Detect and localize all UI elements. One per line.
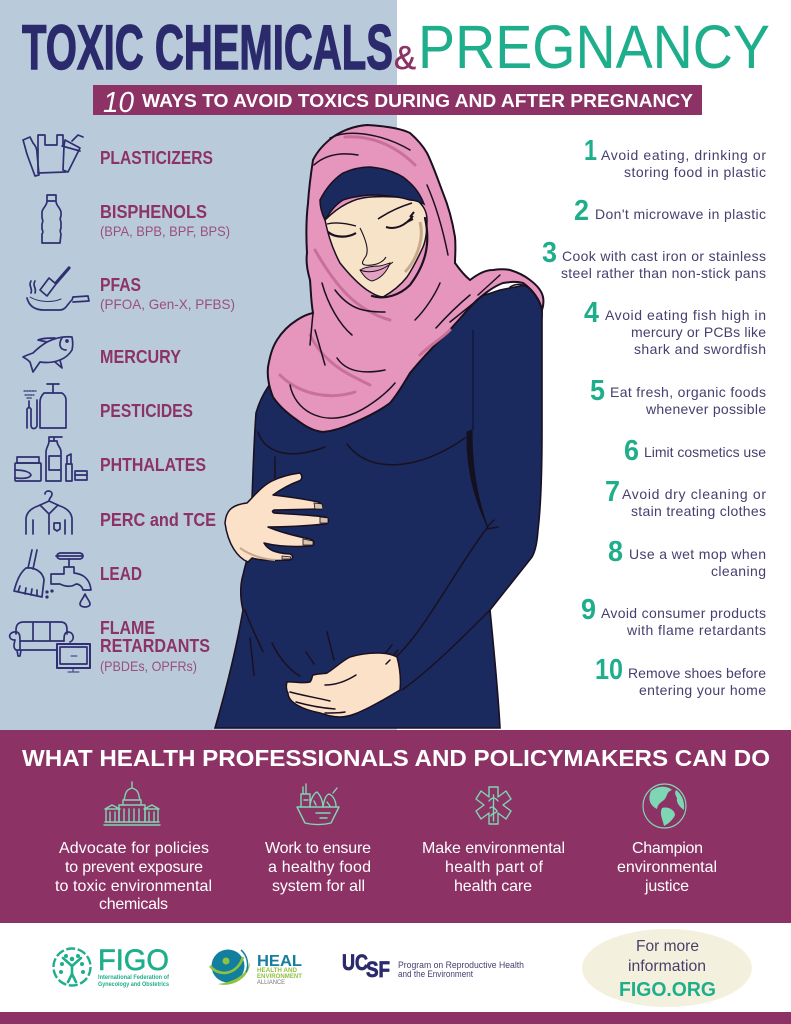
text: perc and tce: PERC and TCE bbox=[100, 510, 216, 530]
text: advocate: Advocate for policies bbox=[59, 840, 209, 857]
text: justice bbox=[617, 840, 717, 895]
text: bisphenols bbox=[100, 202, 230, 239]
text: lead: LEAD bbox=[100, 564, 142, 584]
face bbox=[325, 197, 427, 297]
way 9: 9 bbox=[581, 594, 596, 626]
way 4: mercury or PCBs like bbox=[631, 324, 766, 340]
footer bar bbox=[0, 1012, 791, 1024]
way 6 bbox=[624, 435, 766, 467]
way 1 bbox=[584, 135, 766, 180]
illustration: pregnant woman in hijab bbox=[215, 125, 543, 728]
text: health care: health care bbox=[454, 878, 532, 895]
way 10: Remove shoes before bbox=[628, 665, 766, 681]
callout: for more information: FIGO.ORG bbox=[619, 979, 716, 1001]
logo: FIGO bbox=[54, 944, 170, 988]
way 4 bbox=[584, 297, 766, 357]
text: advocate bbox=[55, 840, 212, 913]
text: plasticizers: PLASTICIZERS bbox=[100, 148, 213, 168]
ways list bbox=[542, 135, 766, 698]
way 5: Eat fresh, organic foods bbox=[610, 384, 766, 400]
panel: blue left background bbox=[0, 0, 397, 730]
text: pfas bbox=[100, 275, 235, 312]
chemical list bbox=[10, 135, 235, 674]
logo: UCSF: SF bbox=[366, 957, 390, 982]
way 9: with flame retardants bbox=[626, 622, 766, 638]
logo: FIGO: FIGO bbox=[98, 944, 169, 977]
way 7 bbox=[605, 476, 766, 519]
dress folds bbox=[245, 330, 498, 690]
logo: FIGO: Gynecology and Obstetrics bbox=[98, 981, 169, 988]
logo: UCSF: and the Environment bbox=[398, 969, 473, 979]
icon: plasticizers bbox=[23, 135, 83, 176]
way 7: 7 bbox=[605, 476, 620, 508]
way 10: 10 bbox=[595, 654, 623, 686]
text: advocate: to toxic environmental bbox=[55, 878, 212, 895]
logo: UCSF: UC bbox=[342, 950, 368, 975]
text: bisphenols: BISPHENOLS bbox=[100, 202, 207, 222]
text: bisphenols: (BPA, BPB, BPF, BPS) bbox=[100, 223, 230, 239]
logo: UCSF: Program on Reproductive Health bbox=[398, 960, 524, 970]
way 8: cleaning bbox=[711, 563, 766, 579]
way 1: 1 bbox=[584, 135, 597, 167]
callout: for more information bbox=[582, 929, 752, 1007]
way 1: Avoid eating, drinking or bbox=[601, 147, 766, 163]
dress bbox=[215, 284, 542, 728]
way 3 bbox=[542, 237, 766, 281]
way 8 bbox=[608, 536, 766, 579]
upper hand bbox=[225, 473, 328, 562]
logo: UCSF bbox=[342, 950, 524, 982]
way 10 bbox=[595, 654, 766, 698]
subtitle banner: WAYS TO AVOID TOXICS DURING AND AFTER PREGNANCY bbox=[142, 91, 693, 111]
text: flame retardants: RETARDANTS bbox=[100, 636, 210, 656]
text: pfas: (PFOA, Gen-X, PFBS) bbox=[100, 296, 235, 312]
way 2: 2 bbox=[574, 195, 589, 227]
icon: sprayer bbox=[24, 384, 66, 429]
title: & bbox=[394, 39, 416, 76]
logo: HEAL: ENVIRONMENT bbox=[257, 974, 302, 980]
text: health care: health part of bbox=[445, 859, 544, 876]
text: flame retardants: FLAME bbox=[100, 618, 155, 638]
headband bbox=[320, 167, 424, 220]
icon: food bowl bbox=[297, 784, 339, 824]
way 3: Cook with cast iron or stainless bbox=[562, 248, 766, 264]
way 4: 4 bbox=[584, 297, 599, 329]
text: food system bbox=[265, 840, 371, 895]
text: justice: environmental bbox=[617, 859, 717, 876]
way 8: Use a wet mop when bbox=[629, 546, 766, 562]
way 5: whenever possible bbox=[645, 401, 766, 417]
way 8: 8 bbox=[608, 536, 623, 568]
hijab folds bbox=[280, 133, 527, 418]
callout: for more information: For more bbox=[636, 938, 699, 955]
text: advocate: to prevent exposure bbox=[65, 859, 203, 876]
way 4: Avoid eating fish high in bbox=[605, 307, 766, 323]
way 7: Avoid dry cleaning or bbox=[622, 486, 766, 502]
way 1: storing food in plastic bbox=[624, 164, 766, 180]
text: mercury: MERCURY bbox=[100, 347, 181, 367]
text: health care bbox=[422, 840, 565, 895]
text: justice: Champion bbox=[632, 840, 703, 857]
way 3: steel rather than non-stick pans bbox=[561, 265, 766, 281]
icon: globe bbox=[643, 784, 686, 828]
way 2: Don't microwave in plastic bbox=[595, 206, 766, 222]
logo: HEAL: HEALTH AND bbox=[257, 968, 298, 974]
icon: bottle bbox=[42, 195, 61, 243]
icon: fish bbox=[23, 337, 73, 372]
way 3: 3 bbox=[542, 237, 557, 269]
icon: pan bbox=[27, 268, 89, 310]
hijab bbox=[268, 125, 543, 432]
logo: HEAL: ALLIANCE bbox=[257, 980, 285, 986]
way 9: Avoid consumer products bbox=[601, 605, 766, 621]
text: phthalates: PHTHALATES bbox=[100, 455, 206, 475]
logo: FIGO: International Federation of bbox=[98, 974, 170, 981]
text: flame retardants: (PBDEs, OPFRs) bbox=[100, 658, 197, 674]
way 10: entering your home bbox=[639, 682, 766, 698]
text: flame retardants bbox=[100, 618, 210, 674]
text: food system: a healthy food bbox=[268, 859, 371, 876]
way 6: 6 bbox=[624, 435, 639, 467]
icon: jacket on hanger bbox=[26, 491, 72, 534]
text: pesticides: PESTICIDES bbox=[100, 401, 193, 421]
facial features bbox=[327, 203, 421, 281]
icon: cosmetics bbox=[15, 437, 87, 481]
way 4: shark and swordfish bbox=[634, 341, 766, 357]
logo: HEAL bbox=[210, 950, 302, 986]
icon: medical star bbox=[476, 787, 511, 824]
text: pfas: PFAS bbox=[100, 275, 141, 295]
heading: WHAT HEALTH PROFESSIONALS AND POLICYMAKERS CAN DO bbox=[22, 745, 770, 771]
panel: what health professionals and policymakers can do bbox=[0, 730, 791, 923]
way 2 bbox=[574, 195, 766, 227]
way 5 bbox=[590, 375, 766, 417]
text: health care: Make environmental bbox=[422, 840, 565, 857]
title: TOXIC CHEMICALS bbox=[22, 13, 393, 83]
way 5: 5 bbox=[590, 375, 605, 407]
logo: HEAL: HEAL bbox=[257, 953, 302, 970]
subtitle banner: 10 bbox=[103, 87, 134, 119]
text: justice: justice bbox=[644, 878, 689, 895]
subtitle banner bbox=[93, 85, 702, 119]
way 6: Limit cosmetics use bbox=[644, 444, 766, 460]
way 9 bbox=[581, 594, 766, 638]
lower hand bbox=[286, 653, 400, 717]
icon: capitol building bbox=[104, 782, 160, 825]
icon: sofa and monitor bbox=[10, 622, 90, 672]
text: food system: Work to ensure bbox=[265, 840, 371, 857]
text: advocate: chemicals bbox=[99, 896, 168, 913]
way 7: stain treating clothes bbox=[631, 503, 766, 519]
icon: broom and faucet bbox=[14, 550, 91, 607]
callout: for more information: information bbox=[628, 958, 706, 975]
text: food system: system for all bbox=[272, 878, 365, 895]
